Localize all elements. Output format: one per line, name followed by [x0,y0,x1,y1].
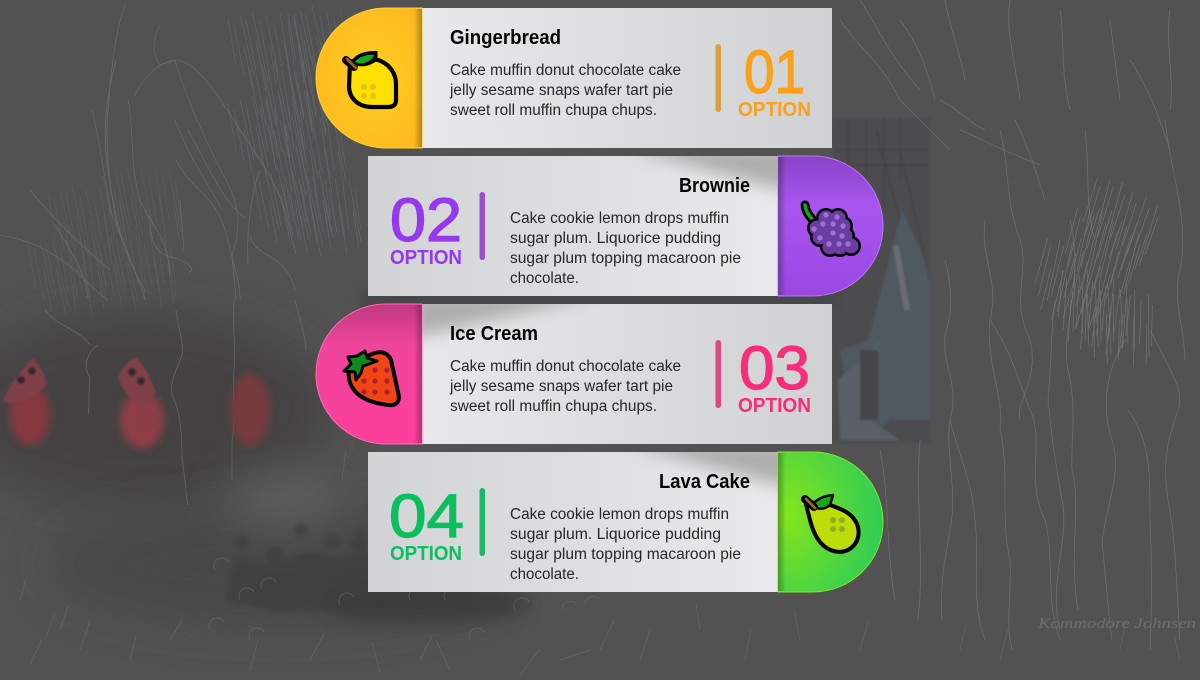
panel: option 01 Gingerbread [316,8,832,148]
pill 02 purple [778,156,883,296]
number 03: 03 [739,334,810,402]
pill 03 pink [316,304,422,444]
text block 04: chocolate. [510,566,579,583]
heading: Ice Cream: Ice Cream [450,323,538,345]
panel: option 03 Ice Cream [316,294,832,444]
text block 01: jelly sesame snaps wafer tart pie [449,82,673,99]
text block 02: sugar plum topping macaroon pie [510,250,741,267]
label: OPTION 01: OPTION [738,99,811,121]
scratches and crowd arcs bottom [20,450,1180,675]
label: OPTION 04: OPTION [390,543,462,565]
text block 02: sugar plum. Liquorice pudding [510,230,721,247]
text block 03 [449,358,681,415]
heading: Gingerbread: Gingerbread [450,27,561,49]
pill 01 yellow [316,8,422,148]
icon: grapes [805,205,861,257]
watermark: Kommodore Johnsen [1037,616,1196,632]
text block 03: sweet roll muffin chupa chups. [450,398,657,415]
text block 02 [510,210,741,287]
text block 01: Cake muffin donut chocolate cake [450,62,681,79]
number 01: 01 [744,38,805,106]
scratches right dense patch [1017,171,1170,371]
shadow on card 03 [422,304,580,344]
card 02 background [368,156,778,296]
heading: Lava Cake: Lava Cake [659,471,750,493]
text block 03: Cake muffin donut chocolate cake [450,358,681,375]
shadow on card 04 [638,452,778,492]
text block 04: sugar plum. Liquorice pudding [510,526,721,543]
pill 04 green [778,452,883,592]
text block 02: chocolate. [510,270,579,287]
text block 04: sugar plum topping macaroon pie [510,546,741,563]
text block 03: jelly sesame snaps wafer tart pie [449,378,673,395]
icon: pear [805,495,859,552]
label: OPTION 03: OPTION [738,395,811,417]
card 01 background [422,8,832,148]
icon: strawberry [344,351,399,405]
divider 03 [716,340,721,408]
card 03 background [422,304,832,444]
label: OPTION 02: OPTION [390,247,462,269]
number 04: 04 [389,482,464,550]
panel: option 04 Lava Cake [368,442,883,592]
heading: Brownie: Brownie [679,175,750,197]
text block 01 [449,62,681,119]
text block 01: sweet roll muffin chupa chups. [450,102,657,119]
crowd silhouettes [225,523,377,612]
number 02: 02 [390,186,462,254]
shadow on card 02 [638,156,778,196]
text block 02: Cake cookie lemon drops muffin [510,210,729,227]
scratches dense bluish near pill 01 [228,6,366,256]
divider 02 [480,192,485,260]
divider 04 [480,488,485,556]
panel: option 02 Brownie [368,146,883,296]
card 04 background [368,452,778,592]
icon: lemon [346,51,396,107]
scratches left [0,5,306,505]
text block 04: Cake cookie lemon drops muffin [510,506,729,523]
scratches right [840,0,1185,650]
background: red skull banners [3,358,270,448]
divider 01 [716,44,721,112]
stage block with blue lights [832,118,930,443]
text block 04 [510,506,741,583]
